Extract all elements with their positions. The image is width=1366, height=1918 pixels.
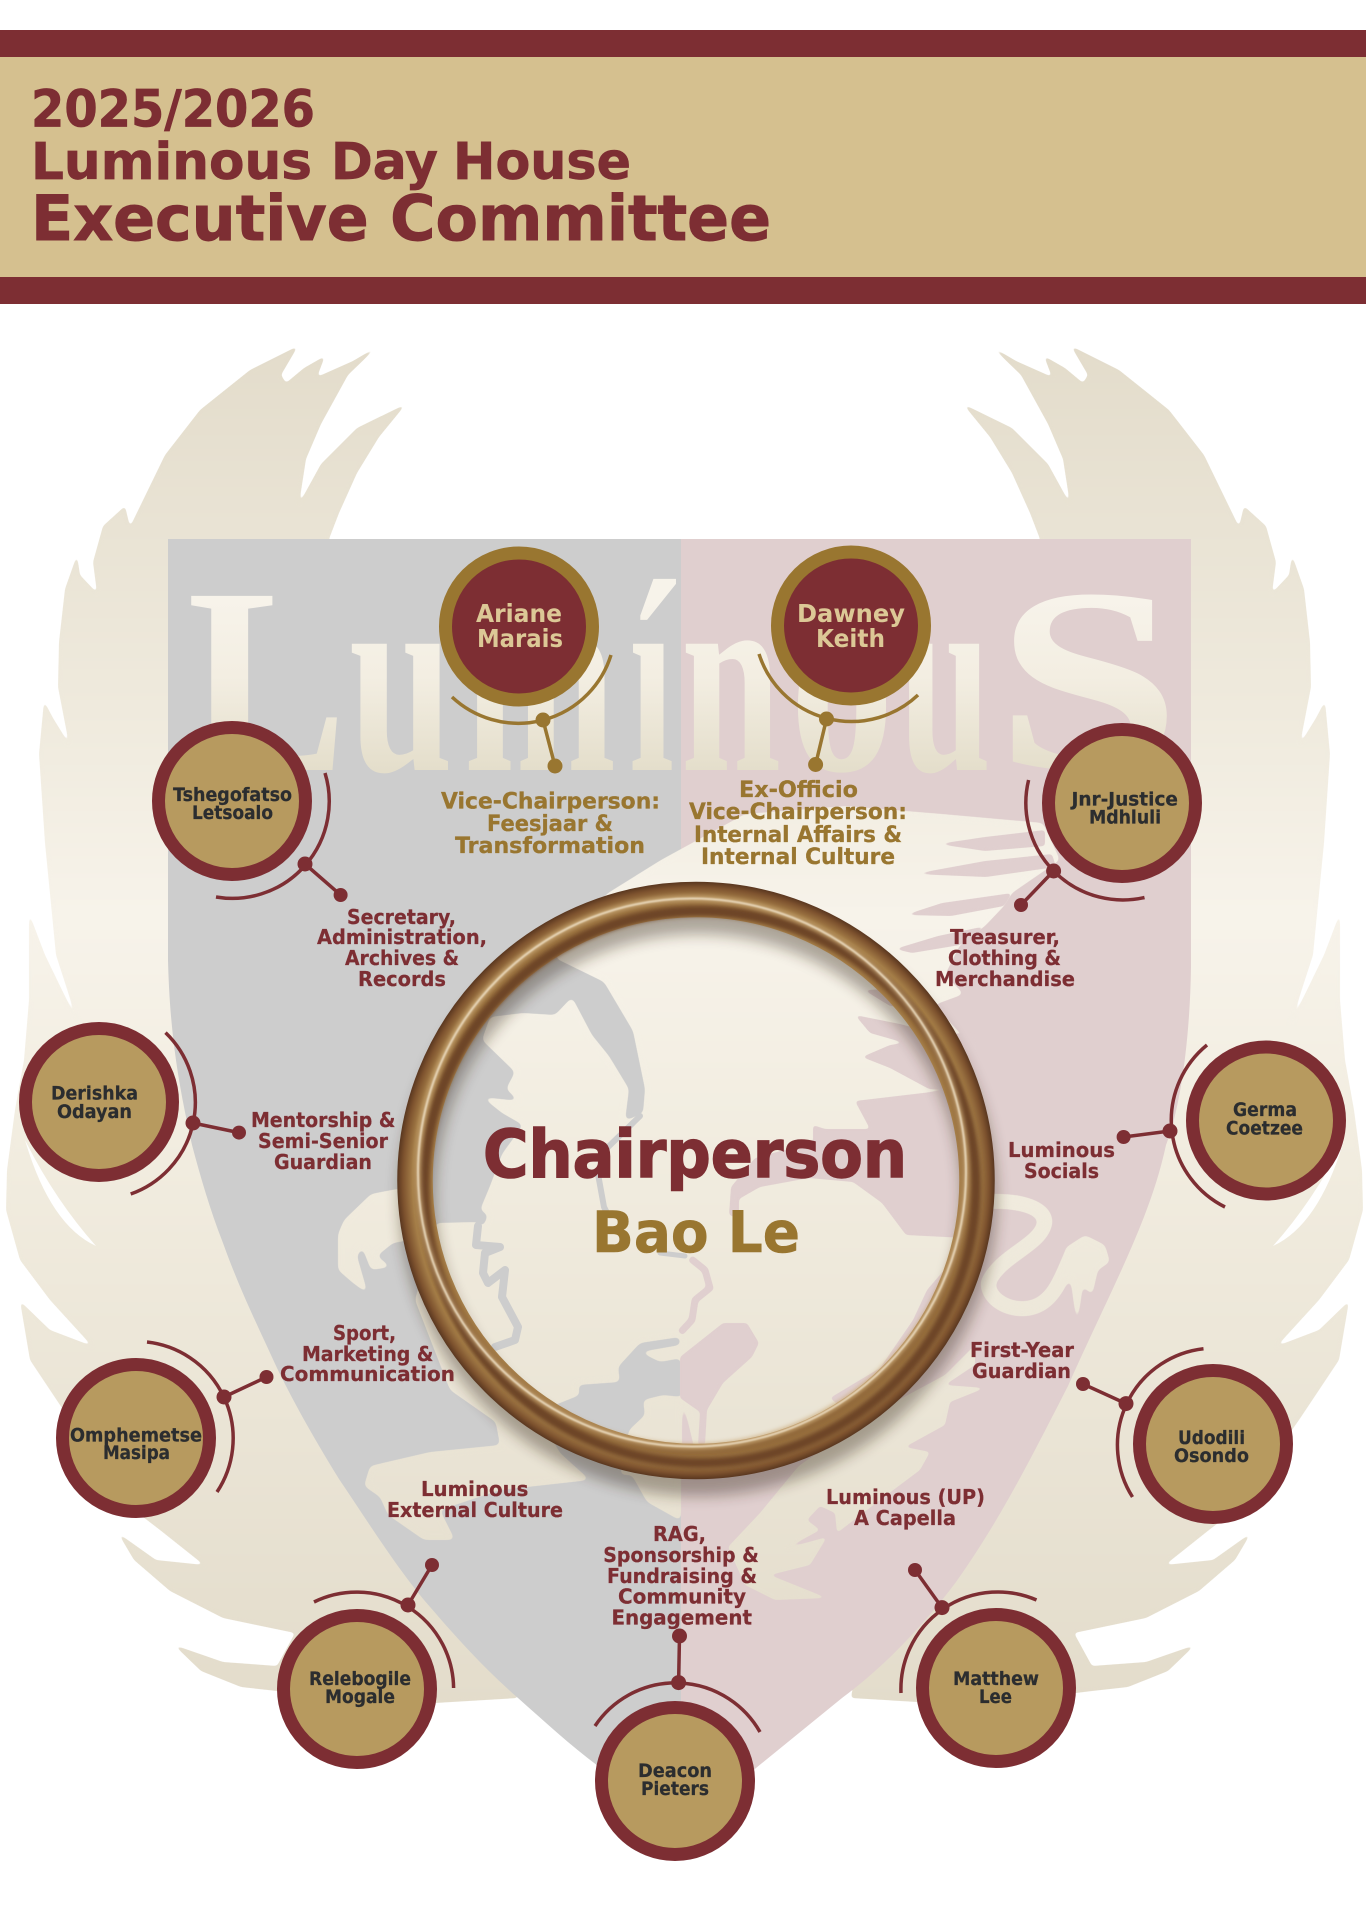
vice-chair: Dawney Keith: Dawney: [797, 599, 905, 628]
role label: Archives &: [345, 946, 459, 970]
role label: Internal Affairs &: [694, 823, 902, 848]
griffin tail: [975, 1201, 1072, 1309]
role label: Secretary,: [347, 905, 456, 929]
member: Relebogile Mogale: Mogale: [325, 1686, 395, 1708]
role label: [251, 1108, 396, 1174]
role label: [935, 925, 1075, 991]
chairperson title: Chairperson: [483, 1116, 907, 1193]
title: 2025/2026: [31, 80, 315, 140]
role label: [689, 778, 907, 870]
vice-chair: Dawney Keith: [689, 552, 924, 870]
pink body block: [729, 1088, 965, 1238]
role label: Luminous (UP): [826, 1485, 985, 1509]
shield left half: [168, 539, 681, 1838]
ring base: [415, 900, 977, 1462]
Luminous wordmark: S: [995, 535, 1181, 825]
member: Derishka Odayan: Derishka: [51, 1082, 138, 1104]
role label: Guardian: [972, 1359, 1071, 1383]
Luminous wordmark: u: [349, 526, 453, 830]
Luminous wordmark: L: [187, 533, 347, 828]
connector: [314, 1558, 454, 1688]
ring shadow: [417, 916, 979, 1478]
vice-chair: Ariane Marais: Ariane: [476, 599, 562, 628]
Luminous wordmark: o: [790, 526, 894, 830]
vice-chair: Ariane Marais: Marais: [477, 624, 563, 653]
connector: [1076, 1349, 1204, 1497]
connector: [147, 1342, 274, 1492]
member: Udodili Osondo: Udodili: [1178, 1427, 1245, 1449]
role label: [317, 905, 487, 991]
member: Omphemetse Masipa: Omphemetse: [70, 1424, 202, 1446]
role label: Mentorship &: [251, 1108, 396, 1132]
role label: Sport,: [333, 1321, 396, 1345]
role label: Ex-Officio: [739, 778, 858, 803]
ring highlight: [418, 898, 966, 1446]
header banner: [0, 30, 1366, 304]
Luminous wordmark: [187, 526, 1181, 830]
pink lower band: [830, 1262, 968, 1431]
left wing: [6, 346, 518, 1703]
member: Jnr-Justice Mdhluli: [935, 730, 1196, 991]
member: Germa Coetzee: [1008, 1045, 1340, 1207]
chairperson name: Bao Le: [592, 1200, 800, 1266]
member: Matthew Lee: Lee: [979, 1686, 1012, 1708]
connector: [759, 654, 918, 772]
member: Deacon Pieters: Pieters: [641, 1778, 709, 1800]
role label: RAG,: [653, 1522, 706, 1546]
role label: Treasurer,: [950, 925, 1060, 949]
role label: [280, 1321, 455, 1386]
role label: Sponsorship &: [603, 1543, 759, 1567]
shield: [168, 539, 1191, 1838]
pink leg gap: [680, 1323, 759, 1445]
vice-chair: Ariane Marais: [441, 553, 660, 859]
griffin claw sliver: [640, 1345, 682, 1362]
member: Deacon Pieters: [595, 1522, 760, 1854]
connector: [452, 655, 611, 774]
member: Omphemetse Masipa: Masipa: [103, 1442, 170, 1464]
griffin silhouette: [338, 806, 1110, 1540]
pink claw outline: [680, 1258, 710, 1333]
role label: [387, 1477, 563, 1522]
role label: Clothing &: [948, 946, 1061, 970]
member: Matthew Lee: Matthew: [953, 1668, 1039, 1690]
member: Germa Coetzee: Germa: [1233, 1099, 1297, 1121]
top maroon bar: [0, 30, 1366, 57]
member: Deacon Pieters: Deacon: [638, 1760, 712, 1782]
connector: [1014, 780, 1144, 912]
member: Matthew Lee: [826, 1485, 1070, 1762]
role label: First-Year: [970, 1338, 1075, 1362]
right wing: [851, 346, 1363, 1703]
role label: Luminous: [421, 1477, 528, 1501]
member: Tshegofatso Letsoalo: [158, 728, 487, 991]
griffin foreleg: [364, 1400, 590, 1540]
griffin body and wing: [415, 806, 1060, 1472]
role label: [826, 1485, 985, 1530]
member: Relebogile Mogale: Relebogile: [309, 1668, 411, 1690]
bottom maroon bar: [0, 277, 1366, 304]
role label: Transformation: [455, 834, 645, 859]
role label: Feesjaar &: [487, 812, 613, 837]
role label: Luminous: [1008, 1138, 1115, 1162]
role label: Semi-Senior: [258, 1129, 389, 1153]
title: Day: [331, 133, 438, 192]
role label: Fundraising &: [607, 1564, 757, 1588]
wing feather gaps: [938, 830, 1045, 851]
griffin neck lines: [476, 1116, 685, 1347]
role label: Internal Culture: [701, 845, 895, 870]
role label: [441, 790, 660, 859]
title: Luminous: [31, 133, 312, 192]
central bronze ring: [415, 898, 979, 1478]
role label: Engagement: [611, 1606, 752, 1630]
connector: [131, 1033, 246, 1194]
chairperson title: [483, 1116, 907, 1266]
Luminous wordmark: m: [464, 526, 616, 830]
member: Udodili Osondo: Osondo: [1174, 1445, 1249, 1467]
title: [31, 80, 771, 255]
Luminous wordmark: u: [899, 526, 991, 830]
Luminous wordmark: n: [681, 526, 781, 830]
griffin rear haunch: [728, 1345, 985, 1600]
griffin detail gaps: [680, 830, 1056, 1445]
griffin fore claw: [338, 1189, 410, 1294]
role label: Guardian: [274, 1150, 372, 1174]
connector: [216, 773, 348, 902]
role label: External Culture: [387, 1498, 563, 1522]
connector: [595, 1628, 760, 1732]
role label: [603, 1522, 759, 1630]
griffin lower centre: [629, 1470, 681, 1521]
role label: [970, 1338, 1075, 1383]
member: Relebogile Mogale: [284, 1477, 563, 1762]
tan title panel: [0, 57, 1366, 277]
member: Omphemetse Masipa: [62, 1321, 455, 1512]
role label: A Capella: [854, 1506, 956, 1530]
emblem wings: [6, 346, 1363, 1703]
shield right half: [681, 539, 1191, 1838]
member: Udodili Osondo: [970, 1338, 1286, 1518]
member: Derishka Odayan: [26, 1028, 396, 1194]
role label: Administration,: [317, 925, 487, 949]
role label: Marketing &: [302, 1342, 434, 1366]
role label: Records: [358, 967, 446, 991]
role label: Communication: [280, 1362, 455, 1386]
ring brown band: [424, 911, 976, 1463]
member: Tshegofatso Letsoalo: Letsoalo: [192, 802, 273, 824]
vice-chair: Dawney Keith: Keith: [816, 624, 885, 653]
title: Executive Committee: [31, 182, 771, 255]
role label: Community: [618, 1584, 746, 1608]
role label: Vice-Chairperson:: [689, 800, 907, 825]
role label: [1008, 1138, 1115, 1183]
member: Jnr-Justice Mdhluli: Mdhluli: [1089, 806, 1161, 828]
title: House: [453, 133, 631, 192]
member: Jnr-Justice Mdhluli: Jnr-Justice: [1070, 788, 1178, 810]
connector: [901, 1563, 1036, 1693]
member: Derishka Odayan: Odayan: [57, 1101, 132, 1123]
ring highlight glow: [418, 898, 966, 1446]
member: Germa Coetzee: Coetzee: [1226, 1118, 1303, 1140]
connector: [1117, 1045, 1225, 1207]
role label: Socials: [1024, 1159, 1099, 1183]
role label: Merchandise: [935, 967, 1075, 991]
Luminous wordmark: í: [629, 526, 677, 830]
member: Tshegofatso Letsoalo: Tshegofatso: [173, 784, 292, 806]
role label: Vice-Chairperson:: [441, 790, 660, 814]
